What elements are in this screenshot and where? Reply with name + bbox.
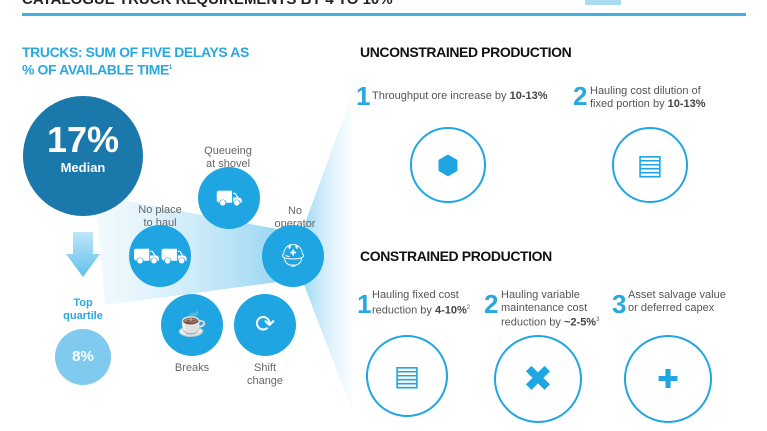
text: change [247,375,283,387]
text: No [288,205,302,217]
text: or deferred capex [628,302,714,314]
median circle: 17% [47,119,119,160]
text: maintenance cost [501,302,587,314]
text: ▤ [394,360,420,391]
text: Hauling fixed cost [372,289,459,301]
text: 1 [357,289,371,319]
text: Shift [254,362,276,374]
text: Asset salvage value [628,289,726,301]
text: reduction by ~2-5%3 [501,317,599,329]
left heading [22,44,249,78]
text: ⛟ [215,185,243,210]
top quartile: quartile [63,310,103,322]
text: ▤ [637,149,663,180]
text: 1 [356,81,370,111]
text: Breaks [175,362,209,374]
text: fixed portion by 10-13% [590,98,706,110]
text: Hauling variable [501,289,580,301]
text: 2 [573,81,587,111]
top quartile [63,297,103,322]
text: ✖ [523,358,553,399]
left heading: % OF AVAILABLE TIME1 [22,62,172,78]
delay circles [204,145,252,170]
text: 3 [612,289,626,319]
text: Throughput ore increase by 10-13% [372,90,548,102]
text: 2 [484,289,498,319]
text: ⛑ [279,243,307,268]
median circle [23,96,143,216]
text: ⟳ [255,311,275,338]
text: to haul [143,217,177,229]
unconstrained: UNCONSTRAINED PRODUCTION [360,44,571,60]
delay circles: at shovel [206,158,250,170]
delay circles: Queueing [204,145,252,157]
text: Hauling cost dilution of [590,85,701,97]
text: operator [274,218,315,230]
text: No place [138,204,182,216]
8% circle: 8% [72,348,94,365]
text: ☕ [177,311,207,338]
arrow down [66,232,100,277]
8% circle [55,329,111,385]
median circle: Median [61,160,105,175]
text: reduction by 4-10%2 [372,304,470,316]
constrained: CONSTRAINED PRODUCTION [360,248,552,264]
top quartile: Top [73,297,93,309]
text: ⛟⛟ [132,243,188,268]
left heading: TRUCKS: SUM OF FIVE DELAYS AS [22,44,249,60]
text: ⬢ [437,150,459,180]
text: ✚ [657,364,679,394]
